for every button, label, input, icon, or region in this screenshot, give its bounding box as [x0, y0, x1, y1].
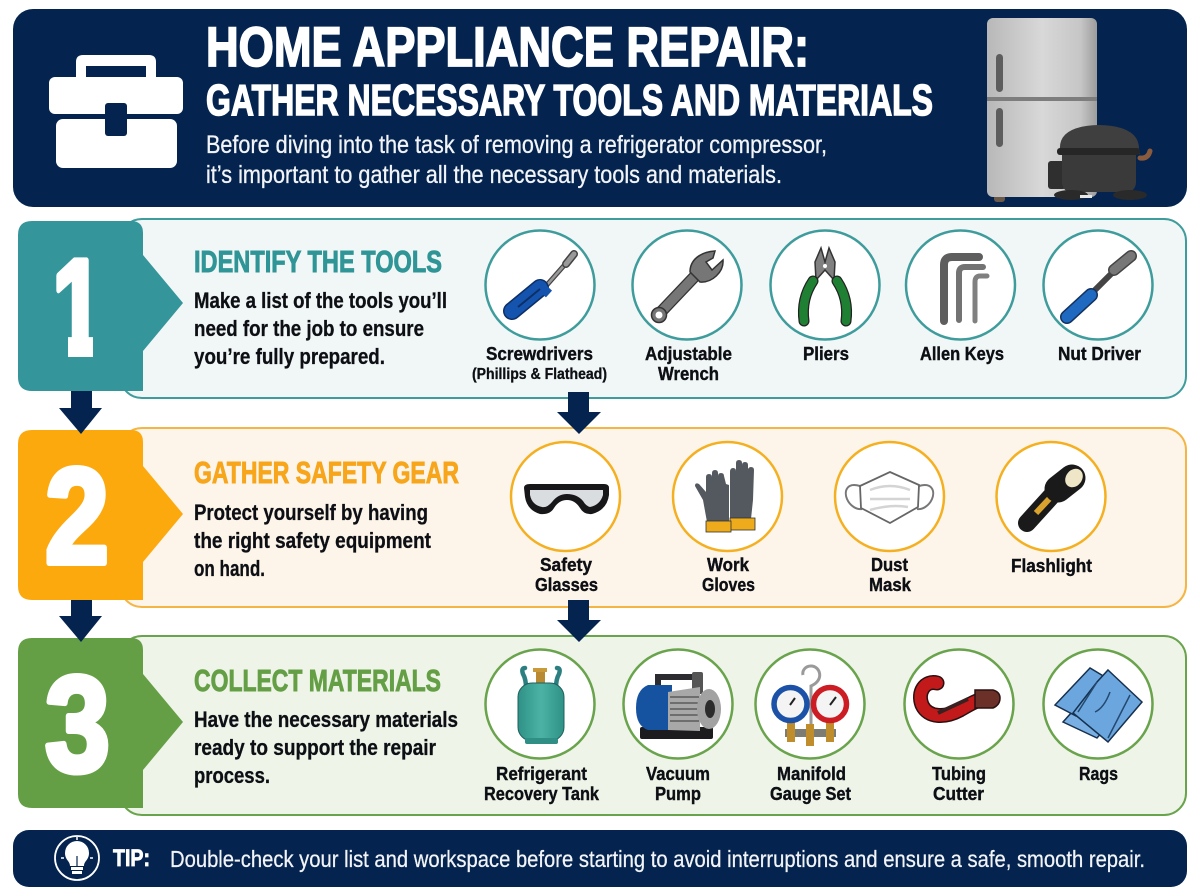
header banner [13, 9, 1187, 207]
tool: screwdrivers [472, 230, 607, 383]
step 2 description: Protect yourself by having [194, 500, 428, 525]
step 1 panel [18, 219, 1186, 398]
tool: nut driver [1044, 230, 1152, 364]
material: tubing cutter: Cutter [933, 783, 984, 804]
arrow: step 1 to step 2 center [557, 392, 601, 434]
tip bar [13, 830, 1187, 887]
gear: safety glasses: Glasses [535, 574, 598, 595]
gear: work gloves: Work [707, 554, 750, 575]
tool: adjustable wrench [632, 230, 742, 384]
icon: light bulb [55, 836, 99, 880]
step 3 description: Have the necessary materials [194, 707, 458, 732]
gear: safety glasses: Safety [540, 554, 593, 575]
tip label: TIP: [113, 845, 150, 872]
step 1 description: need for the job to ensure [194, 316, 424, 341]
step 3 description: process. [194, 763, 270, 788]
icon: refrigerator [987, 18, 1097, 202]
step 2 number tab: 2 [45, 440, 109, 592]
material: vacuum pump: Vacuum [646, 763, 710, 784]
gear: dust mask [835, 442, 944, 595]
step 1 heading: IDENTIFY THE TOOLS [194, 244, 442, 279]
material: manifold gauge set [756, 650, 864, 804]
step 1 description: Make a list of the tools you’ll [194, 288, 447, 313]
step 3 heading: COLLECT MATERIALS [194, 663, 441, 698]
gear: flashlight [996, 442, 1106, 576]
step 3 panel [18, 636, 1186, 815]
material: vacuum pump [624, 650, 732, 804]
icon: toolbox [49, 55, 183, 168]
material: manifold gauge set: Gauge Set [770, 783, 851, 804]
arrow: step 1 to step 2 left [59, 391, 102, 434]
material: tubing cutter [904, 650, 1014, 804]
icon: compressor [1048, 125, 1150, 200]
material: refrigerant recovery tank [484, 650, 600, 804]
arrow: step 2 to step 3 left [59, 600, 102, 642]
tool: pliers [770, 230, 880, 364]
gear: dust mask: Dust [871, 554, 908, 575]
step 2 description: on hand. [194, 556, 265, 581]
step 3 number tab: 3 [45, 648, 110, 800]
tool: nut driver: Nut Driver [1058, 343, 1141, 364]
title: GATHER NECESSARY TOOLS AND MATERIALS [206, 76, 933, 125]
step 1 description [194, 288, 447, 369]
material: refrigerant recovery tank: Refrigerant [496, 763, 587, 784]
gear: dust mask: Mask [869, 574, 912, 595]
arrow: step 2 to step 3 center [557, 600, 601, 642]
step 2 description [194, 500, 431, 581]
material: tubing cutter: Tubing [932, 763, 986, 784]
material: vacuum pump: Pump [655, 783, 701, 804]
step 1 description: you’re fully prepared. [194, 344, 385, 369]
gear: work gloves [673, 442, 782, 595]
step 3 description: ready to support the repair [194, 735, 436, 760]
tool: pliers: Pliers [803, 343, 849, 364]
tool: allen keys: Allen Keys [920, 343, 1004, 364]
tool: screwdrivers: (Phillips & Flathead) [472, 366, 607, 383]
material: rags [1044, 650, 1152, 784]
intro text: it’s important to gather all the necessary tools and materials. [206, 161, 782, 189]
tool: allen keys [906, 230, 1015, 364]
gear: flashlight: Flashlight [1011, 555, 1092, 576]
tool: adjustable wrench: Adjustable [645, 343, 732, 364]
title [206, 15, 933, 125]
step 2 heading: GATHER SAFETY GEAR [194, 455, 459, 490]
material: refrigerant recovery tank: Recovery Tank [484, 783, 600, 804]
step 2 number tab [18, 430, 183, 600]
step 1 number tab: 1 [52, 231, 104, 383]
intro text [206, 131, 827, 189]
step 2 panel [18, 428, 1186, 607]
step 2 description: the right safety equipment [194, 528, 431, 553]
gear: work gloves: Gloves [702, 574, 755, 595]
tool: adjustable wrench: Wrench [658, 363, 719, 384]
step 1 number tab [18, 221, 183, 391]
gear: safety glasses [511, 442, 620, 595]
step 3 description [194, 707, 458, 788]
material: manifold gauge set: Manifold [777, 763, 846, 784]
material: rags: Rags [1079, 763, 1118, 784]
tool: screwdrivers: Screwdrivers [486, 343, 593, 364]
intro text: Before diving into the task of removing a refrigerator compressor, [206, 131, 827, 159]
step 3 number tab [18, 638, 183, 808]
title: HOME APPLIANCE REPAIR: [206, 15, 809, 78]
